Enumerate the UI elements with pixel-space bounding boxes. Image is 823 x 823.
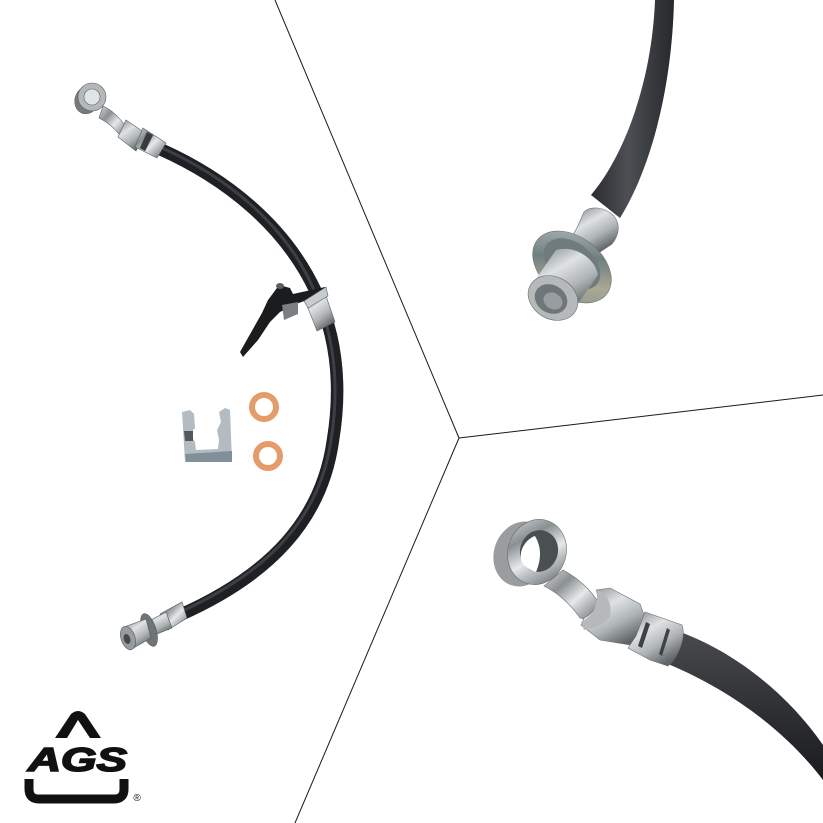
neck crimp: [572, 208, 618, 252]
metal retaining clip: [182, 408, 232, 462]
flange: [519, 216, 625, 318]
black rubber hose: [160, 147, 337, 615]
banjo back: [484, 513, 560, 595]
panel dividers: [275, 0, 823, 823]
panel: full hose assembly: [71, 83, 337, 652]
hose close-up: [668, 632, 823, 780]
ferrule: [581, 588, 646, 646]
retaining bracket: [240, 283, 327, 357]
copper washers: [252, 395, 280, 468]
logo wordmark: AGS: [27, 741, 127, 778]
panel: threaded fitting detail: [519, 0, 674, 329]
logo bracket: [29, 779, 124, 799]
bottom threaded fitting: [118, 602, 187, 652]
center ferrule: [304, 287, 335, 331]
crimp rings: [628, 612, 683, 666]
threaded barrel: [533, 249, 598, 312]
AGS logo: [27, 711, 141, 804]
top banjo fitting: [71, 83, 166, 158]
logo chevron: [55, 711, 101, 738]
banjo ring: [498, 511, 576, 593]
curved stem: [544, 570, 603, 622]
registered mark: ®: [133, 793, 141, 804]
hose close-up: [591, 0, 674, 218]
panel: banjo fitting detail: [484, 511, 823, 780]
